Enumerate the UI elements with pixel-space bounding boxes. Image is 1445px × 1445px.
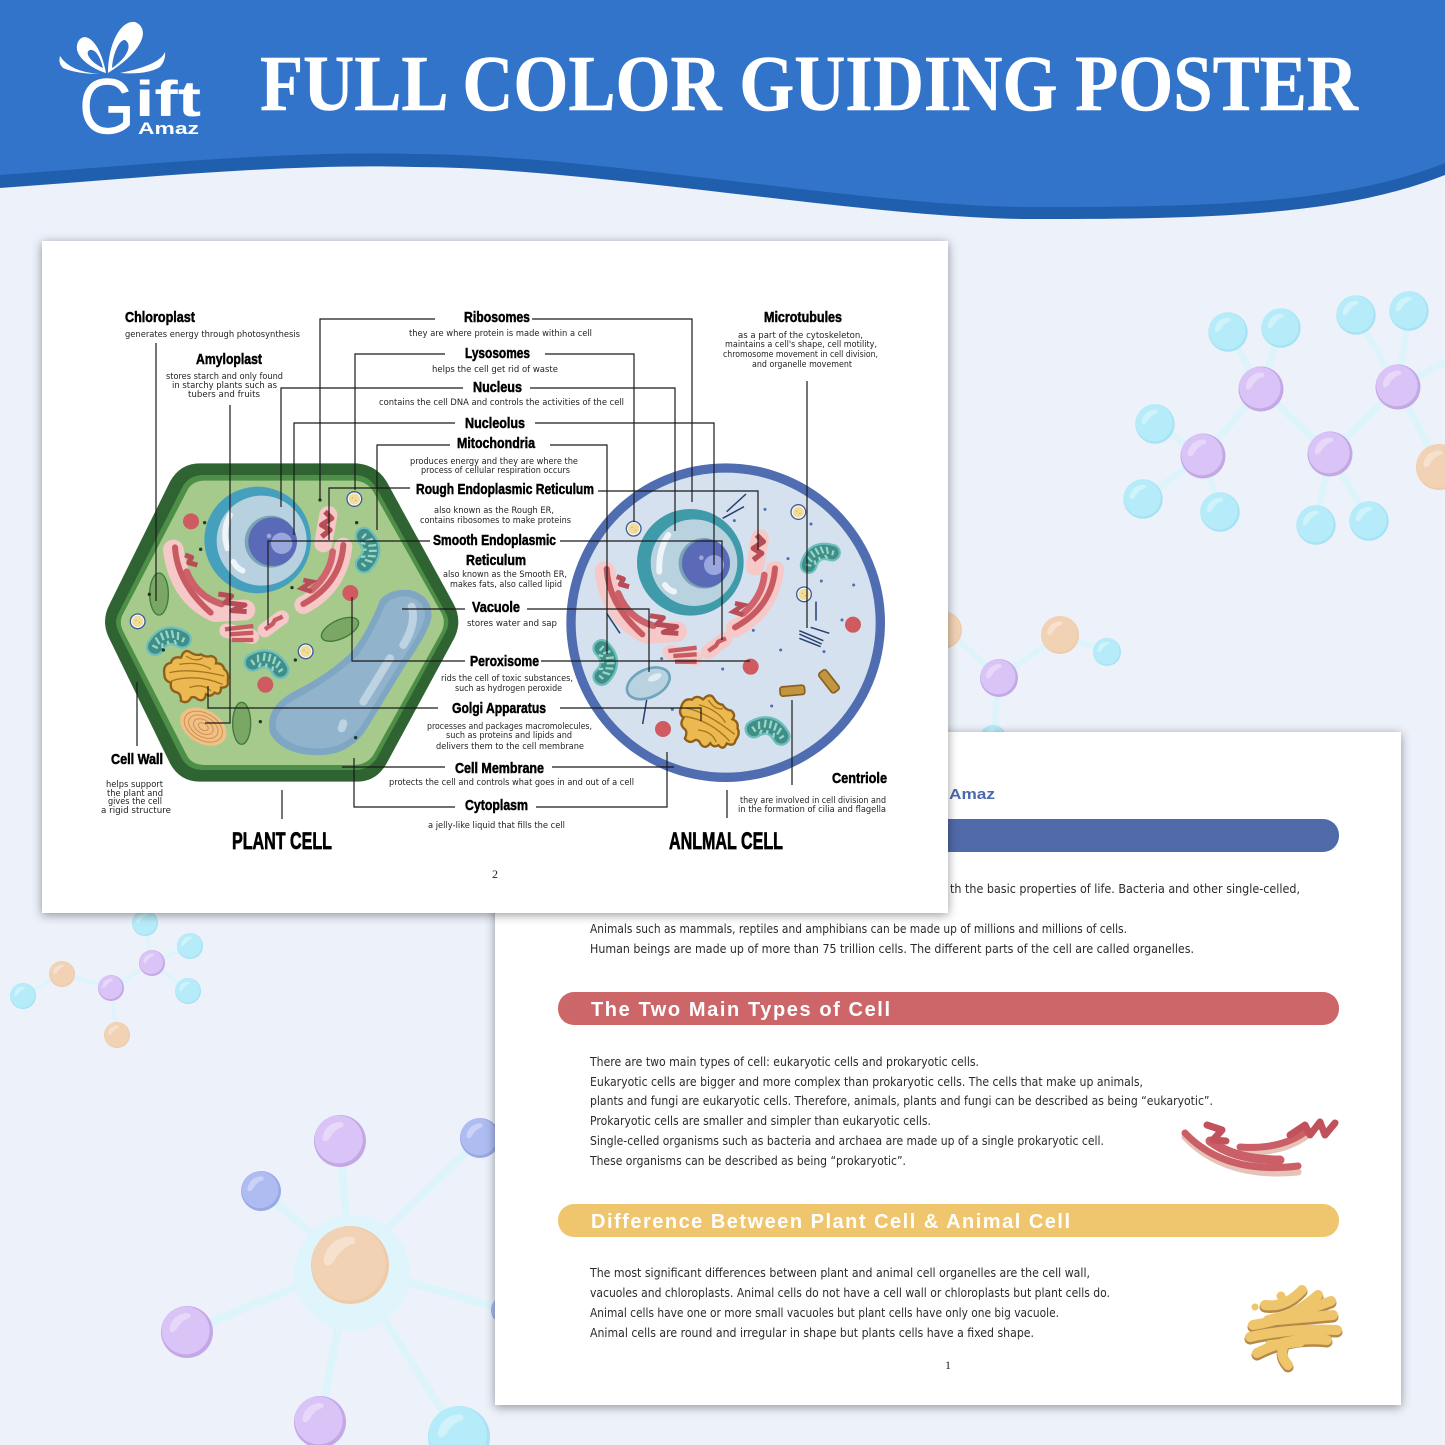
microtubules — [607, 494, 829, 724]
nucleus — [637, 509, 744, 616]
callout: Amyloplast: tubers and fruits — [188, 390, 260, 400]
callout: Cytoplasm — [354, 752, 667, 831]
endoplasmic reticulum right — [733, 535, 775, 628]
callout: Smooth Endoplasmic Reticulum — [268, 532, 722, 640]
text: differences — [589, 1266, 1110, 1340]
icon: endoplasmic reticulum — [1185, 1122, 1335, 1173]
callout: Cell Wall: a rigid structure — [101, 806, 171, 816]
callout: Lysosomes: helps the cell get rid of waste — [432, 365, 558, 375]
heading: PLANT CELL — [232, 790, 332, 855]
endoplasmic reticulum left — [605, 569, 678, 634]
callout: Peroxisome: Peroxisome — [470, 653, 539, 670]
intro text — [590, 882, 1300, 956]
callout: Golgi Apparatus — [208, 686, 701, 752]
callout: Microtubules — [723, 309, 878, 628]
amyloplast — [173, 700, 233, 754]
callout: Amyloplast: stores starch and only found — [166, 372, 283, 382]
ribosomes — [660, 508, 855, 711]
callout: Ribosomes: they are where protein is made within a cell — [409, 329, 592, 339]
callout: Cytoplasm: a jelly-like liquid that fills the cell — [428, 821, 565, 831]
heading: PLANT CELL: PLANT CELL — [232, 828, 332, 855]
cell membrane — [116, 475, 448, 770]
callout: Cell Membrane: protects the cell and controls what goes in and out of a cell — [389, 778, 634, 788]
text: differences: Animal cells are round and irregular in shape but plants cells have a fixed shape. — [590, 1326, 1034, 1340]
callout: Microtubules: chromosome movement in cell division, — [723, 350, 878, 360]
callout: Peroxisome: rids the cell of toxic substances, — [441, 674, 573, 684]
text: two types of cell: Single-celled organisms such as bacteria and archaea are made up of a single prokaryotic cell. — [590, 1134, 1104, 1148]
text: two types of cell: plants and fungi are eukaryotic cells. Therefore, animals, plants and fungi can be described as being “eukaryotic”. — [590, 1094, 1213, 1108]
page 2 sheet: cell diagram — [42, 241, 948, 913]
callout: Smooth Endoplasmic Reticulum: Reticulum — [466, 552, 526, 569]
callout: Cell Wall: the plant and — [107, 789, 163, 799]
callout: Cytoplasm: Cytoplasm — [465, 797, 528, 814]
callout: Vacuole — [402, 599, 649, 672]
callout: Mitochondria: process of cellular respiration occurs — [421, 466, 570, 476]
callout: Cell Wall: Cell Wall — [111, 751, 163, 768]
callout: Rough Endoplasmic Reticulum — [329, 481, 758, 550]
vacuole — [620, 659, 677, 707]
centrioles — [780, 669, 840, 696]
header banner with wave — [0, 0, 1445, 219]
page 1 logo fragment: Amaz — [949, 786, 995, 803]
text: two types of cell: Prokaryotic cells are smaller and simpler than eukaryotic cells. — [590, 1114, 931, 1128]
callout: Smooth Endoplasmic Reticulum: also known as the Smooth ER, — [443, 570, 567, 580]
ribosomes — [148, 498, 358, 739]
callout: Cell Wall: gives the cell — [108, 797, 162, 807]
callout: Centriole: in the formation of cilia and flagella — [738, 805, 886, 815]
logo: GiftAmaz: G — [79, 62, 135, 150]
callout: Centriole — [738, 700, 887, 815]
callout: Peroxisome — [352, 597, 750, 694]
callout: Cell Wall: helps support — [106, 780, 163, 790]
lysosomes — [626, 504, 812, 602]
callout: Chloroplast — [125, 309, 300, 601]
section bar: The Two Main Types of Cell — [558, 992, 1339, 1025]
rough and smooth endoplasmic reticulum — [173, 547, 247, 613]
text: differences: The most significant differences between plant and animal cell organelles are the cell wall, — [589, 1266, 1090, 1280]
page 1 sheet: text page — [495, 732, 1401, 1405]
golgi apparatus — [669, 686, 749, 760]
intro text: th the basic properties of life. Bacteria and other single-celled, — [950, 882, 1300, 896]
callout: Golgi Apparatus: delivers them to the cell membrane — [436, 742, 584, 752]
callout: Microtubules: as a part of the cytoskeleton, — [738, 331, 863, 341]
callout: Vacuole: stores water and sap — [467, 619, 557, 629]
callout: Peroxisome: such as hydrogen peroxide — [455, 684, 562, 694]
logo: GiftAmaz — [59, 22, 201, 150]
cell wall — [105, 463, 458, 782]
callout: Rough Endoplasmic Reticulum: contains ribosomes to make proteins — [420, 516, 571, 526]
callout: Cell Membrane — [342, 760, 674, 788]
mitochondria — [599, 541, 835, 740]
vacuole — [269, 590, 432, 755]
callout: Mitochondria: produces energy and they are where the — [410, 457, 578, 467]
callout: Microtubules: maintains a cell's shape, cell motility, — [725, 340, 877, 350]
callout: Chloroplast: Chloroplast — [125, 309, 195, 326]
plant cell diagram — [105, 463, 458, 782]
callout: Mitochondria: Mitochondria — [457, 435, 536, 452]
callout: Nucleus — [281, 379, 675, 531]
cell membrane — [566, 463, 885, 782]
page number 2: 2 — [492, 867, 498, 881]
cytoplasm — [576, 473, 876, 773]
callout: Ribosomes — [320, 309, 692, 502]
callout: Vacuole: Vacuole — [472, 599, 520, 616]
golgi apparatus — [164, 651, 228, 702]
endoplasmic reticulum small — [225, 617, 283, 640]
callout: Centriole: Centriole — [832, 770, 887, 787]
mitochondria — [150, 534, 377, 673]
animal cell diagram — [566, 463, 885, 782]
lysosomes — [130, 491, 362, 659]
heading: ANIMAL CELL: ANLMAL CELL — [669, 828, 783, 855]
decorative molecule: centre right — [924, 611, 1121, 751]
peroxisomes — [655, 617, 861, 737]
intro text: Animals such as mammals, reptiles and amphibians can be made up of millions and millions of cells. — [590, 922, 1127, 936]
callout: Nucleus: contains the cell DNA and controls the activities of the cell — [379, 398, 624, 408]
text: differences: Animal cells have one or more small vacuoles but plant cells have only one big vacuole. — [590, 1306, 1059, 1320]
nucleus — [204, 487, 311, 593]
callout: Golgi Apparatus: Golgi Apparatus — [452, 700, 546, 717]
callout: Microtubules: and organelle movement — [752, 360, 852, 370]
callout: Centriole: they are involved in cell division and — [740, 796, 886, 806]
callout: Mitochondria — [377, 435, 607, 654]
callout: Nucleolus — [294, 415, 714, 565]
chloroplasts — [150, 573, 362, 744]
callout: Golgi Apparatus: such as proteins and lipids and — [446, 731, 572, 741]
callout: Amyloplast — [166, 351, 283, 723]
callout: Lysosomes: Lysosomes — [465, 345, 530, 362]
section bar: blue — [558, 819, 1339, 852]
text: two types of cell — [589, 1055, 1213, 1168]
callout: Nucleus: Nucleus — [473, 379, 522, 396]
callout: Golgi Apparatus: processes and packages macromolecules, — [427, 722, 592, 732]
section bar: Difference Between Plant Cell & Animal Cell: Difference Between Plant Cell & Animal Cell — [591, 1211, 1070, 1233]
callout: Smooth Endoplasmic Reticulum: Smooth Endoplasmic — [433, 532, 556, 549]
endoplasmic reticulum small — [668, 638, 726, 662]
peroxisomes — [183, 513, 358, 693]
callout: Rough Endoplasmic Reticulum: Rough Endoplasmic Reticulum — [416, 481, 594, 498]
section bar: Difference Between Plant Cell & Animal Cell — [558, 1204, 1339, 1237]
text: two types of cell: There are two main types of cell: eukaryotic cells and prokaryotic cells. — [589, 1055, 979, 1069]
callout: Ribosomes: Ribosomes — [464, 309, 530, 326]
text: differences: vacuoles and chloroplasts. Animal cells do not have a cell wall or chloroplasts but plant cells do. — [590, 1286, 1110, 1300]
icon: golgi apparatus — [1250, 1290, 1337, 1367]
callout: Microtubules: Microtubules — [764, 309, 842, 326]
callout: Cell Wall — [101, 682, 171, 816]
callout: Cell Membrane: Cell Membrane — [455, 760, 544, 777]
callout: Chloroplast: generates energy through photosynthesis — [125, 330, 300, 340]
intro text: Human beings are made up of more than 75 trillion cells. The different parts of the cell are called organelles. — [590, 942, 1194, 956]
text: two types of cell: Eukaryotic cells are bigger and more complex than prokaryotic cells. The cells that make up animals, — [590, 1075, 1143, 1089]
decorative molecule: left — [10, 910, 203, 1048]
callout: Lysosomes — [355, 345, 634, 522]
callout: Smooth Endoplasmic Reticulum: makes fats, also called lipid — [450, 580, 562, 590]
cytoplasm — [121, 481, 444, 765]
callout: Amyloplast: Amyloplast — [196, 351, 262, 368]
callout: Nucleolus: Nucleolus — [465, 415, 525, 432]
logo: GiftAmaz: Amaz — [138, 119, 199, 138]
endoplasmic reticulum right — [302, 512, 343, 605]
logo: GiftAmaz: ift — [135, 71, 201, 127]
callout: Rough Endoplasmic Reticulum: also known as the Rough ER, — [434, 506, 554, 516]
heading: ANIMAL CELL — [669, 790, 783, 855]
callout: Amyloplast: in starchy plants such as — [172, 381, 277, 391]
text: two types of cell: These organisms can be described as being “prokaryotic”. — [589, 1154, 906, 1168]
section bar: The Two Main Types of Cell: The Two Main Types of Cell — [591, 999, 890, 1021]
decorative molecule: bottom — [161, 1115, 519, 1445]
decorative molecule: upper right — [1123, 291, 1445, 545]
page number 1: 1 — [945, 1358, 951, 1372]
